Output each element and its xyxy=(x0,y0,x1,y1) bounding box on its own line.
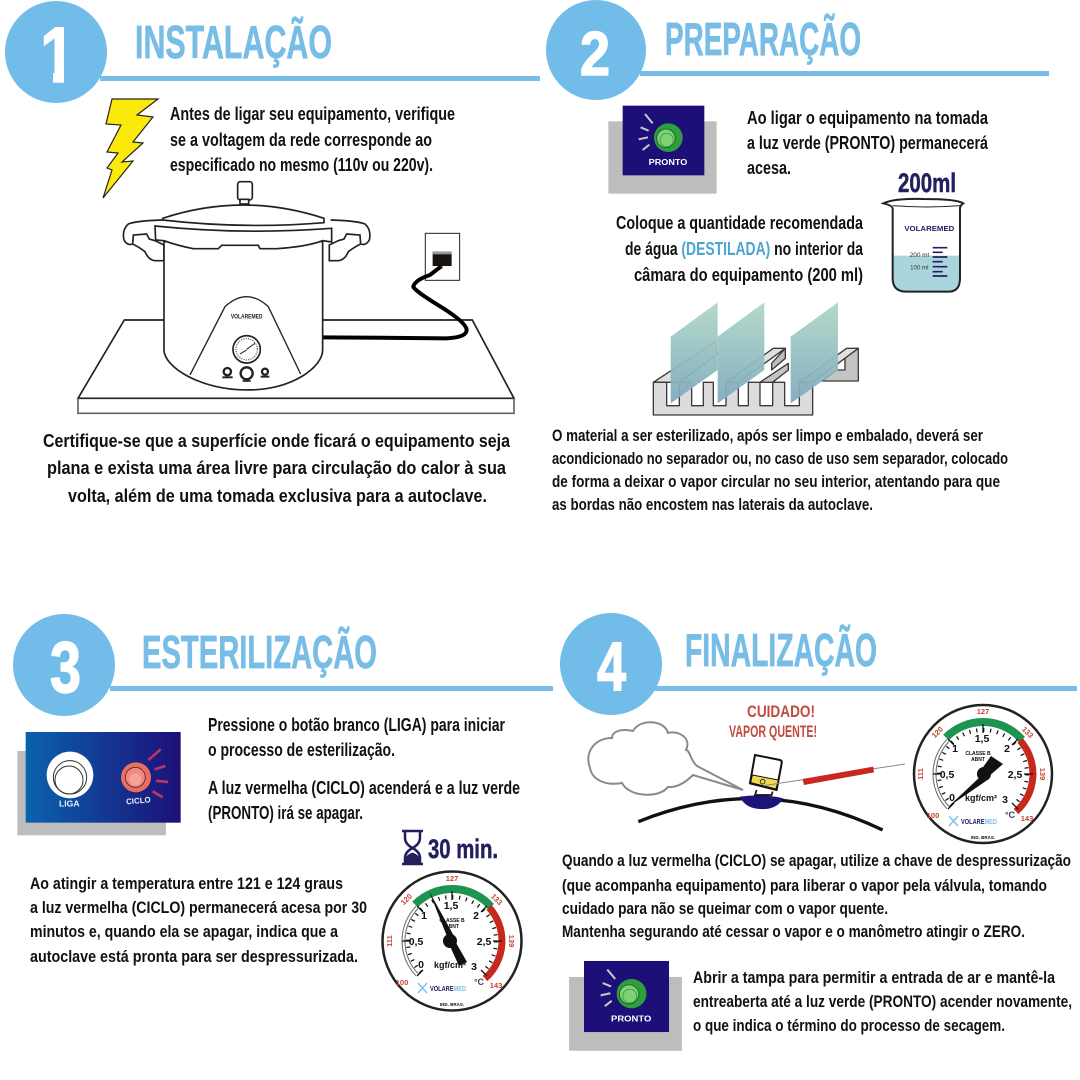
wall socket xyxy=(425,233,460,280)
gauge: pressure during cycle: 127 xyxy=(446,874,458,883)
text: surface check: plana e exista uma área livre para circulação do calor à sua xyxy=(47,458,507,478)
gauge: pressure during cycle: 1,5 xyxy=(444,900,458,912)
icon: steam cloud xyxy=(588,722,743,795)
heading rule 4 xyxy=(650,686,1077,691)
gauge: pressure during cycle: 120 xyxy=(399,892,414,907)
gauge: pressure at zero release: 2 xyxy=(1004,743,1010,755)
number badge 3: 3 xyxy=(50,628,81,708)
warning: hot vapor: CUIDADO! xyxy=(747,702,815,721)
pot body xyxy=(164,242,323,390)
icon: beaker: VOLAREMED xyxy=(904,226,954,233)
heading rule 1 xyxy=(100,76,540,81)
control panel: liga and ciclo xyxy=(17,732,181,835)
table xyxy=(78,320,514,413)
gauge: pressure during cycle: 0 xyxy=(418,959,424,971)
text: cycle timing: autoclave está pronta para ser despressurizada. xyxy=(30,947,358,966)
lid xyxy=(155,182,332,249)
number badge 4: 4 xyxy=(597,628,626,705)
illustration: valve and lid xyxy=(638,755,905,830)
gauge: pressure during cycle: kgf/cm² xyxy=(434,960,466,970)
text: press button: Pressione o botão branco (LIGA) para iniciar xyxy=(208,715,505,735)
gauge: pressure during cycle xyxy=(382,872,522,1010)
number badge 2: 2 xyxy=(580,20,610,89)
text: cycle timing: Ao atingir a temperatura entre 121 e 124 graus xyxy=(30,874,343,893)
control panel: liga and ciclo: CICLO xyxy=(126,795,151,806)
indicator: pronto light xyxy=(608,106,717,194)
text: green light: a luz verde (PRONTO) permanecerá xyxy=(747,133,989,153)
gauge: pressure at zero release: CLASSE B xyxy=(965,751,991,757)
text: material placement xyxy=(552,426,1008,514)
icon: beaker: 100 ml xyxy=(910,266,928,272)
text: green light: acesa. xyxy=(747,158,791,178)
text: distilled water xyxy=(616,213,864,285)
text: depressurize: cuidado para não se queimar com o vapor quente. xyxy=(562,899,888,918)
text: open lid and drying: o que indica o término do processo de secagem. xyxy=(693,1016,1005,1035)
text: green light xyxy=(747,108,989,178)
gauge: pressure during cycle: 0,5 xyxy=(409,936,423,948)
gauge: pressure at zero release: VOLAREMED xyxy=(961,819,997,826)
text: cycle timing: a luz vermelha (CICLO) permanecerá acesa por 30 xyxy=(30,898,367,917)
gauge: pressure at zero release: 139 xyxy=(1038,768,1047,780)
number badge 3 xyxy=(13,614,115,716)
heading rule 3 xyxy=(110,686,553,691)
heading rule 2 xyxy=(640,71,1049,76)
gauge: pressure during cycle: 100 xyxy=(396,978,408,987)
warning: hot vapor: VAPOR QUENTE! xyxy=(729,722,817,741)
gauge: pressure at zero release: 1 xyxy=(952,743,958,755)
gauge: pressure at zero release: 1,5 xyxy=(975,733,989,745)
icon: beaker xyxy=(883,199,963,292)
warning: hot vapor xyxy=(729,702,817,741)
heading: preparação: PREPARAÇÃO xyxy=(665,13,861,65)
heading: instalação: INSTALAÇÃO xyxy=(135,16,332,68)
number badge 4 xyxy=(560,613,662,715)
gauge: pressure at zero release: 111 xyxy=(916,768,925,780)
panel: esterilização xyxy=(13,614,553,1010)
gauge: pressure at zero release: 133 xyxy=(1020,725,1035,740)
gauge: pressure at zero release: 2,5 xyxy=(1008,769,1022,781)
text: voltage check xyxy=(170,104,455,175)
text: surface check xyxy=(43,431,511,506)
gauge: pressure during cycle: 2,5 xyxy=(477,936,491,948)
text: voltage check: se a voltagem da rede corresponde ao xyxy=(170,130,432,150)
text: surface check: volta, além de uma tomada exclusiva para a autoclave. xyxy=(68,486,487,506)
gauge: pressure at zero release: 100 xyxy=(927,811,939,820)
text: distilled water: câmara do equipamento (200 ml) xyxy=(634,265,863,285)
text: surface check: Certifique-se que a superfície onde ficará o equipamento seja xyxy=(43,431,511,451)
gauge: pressure during cycle: ABNT xyxy=(445,924,459,930)
indicator: pronto light again xyxy=(569,961,682,1051)
text: depressurize xyxy=(562,851,1071,941)
gauge: pressure at zero release: 127 xyxy=(977,707,989,716)
text: voltage check: especificado no mesmo (110v ou 220v). xyxy=(170,155,433,175)
illustration: separator rack xyxy=(653,302,858,415)
gauge: pressure during cycle: 2 xyxy=(473,910,479,922)
pot handles xyxy=(123,220,370,261)
gauge: pressure during cycle: 133 xyxy=(489,892,504,907)
gauge: pressure during cycle: CLASSE B xyxy=(439,918,465,924)
gauge: pressure at zero release xyxy=(914,705,1052,843)
gauge: pressure at zero release: 0,5 xyxy=(940,769,954,781)
text: cycle timing: minutos e, quando ela se apagar, indica que a xyxy=(30,922,338,941)
text: press button: o processo de esterilização. xyxy=(208,740,395,760)
heading: esterilização: ESTERILIZAÇÃO xyxy=(142,626,377,678)
text: press button: (PRONTO) irá se apagar. xyxy=(208,803,363,823)
gauge: pressure during cycle: IND. BRAS. xyxy=(440,1002,464,1007)
text: press button: A luz vermelha (CICLO) acenderá e a luz verde xyxy=(208,778,520,798)
gauge: pressure at zero release: 143 xyxy=(1021,814,1033,823)
icon: lightning bolt xyxy=(103,99,158,198)
gauge: pressure during cycle: °C xyxy=(474,977,485,987)
number badge 1: 1 xyxy=(40,10,76,99)
heading: finalização: FINALIZAÇÃO xyxy=(685,624,877,676)
indicator: pronto light: PRONTO xyxy=(649,158,687,167)
label: 200ml: 200ml xyxy=(898,168,956,198)
gauge: pressure at zero release: 120 xyxy=(930,725,945,740)
text: voltage check: Antes de ligar seu equipamento, verifique xyxy=(170,104,455,124)
gauge: pressure during cycle: 111 xyxy=(385,935,394,947)
control panel xyxy=(190,297,301,381)
text: material placement: as bordas não encostem nas laterais da autoclave. xyxy=(552,495,873,514)
power cord xyxy=(323,266,467,338)
gauge: pressure at zero release: IND. BRAS. xyxy=(971,835,995,840)
control panel: liga and ciclo: LIGA xyxy=(59,799,80,809)
indicator: pronto light again: PRONTO xyxy=(611,1015,652,1023)
gauge: pressure at zero release: °C xyxy=(1005,810,1016,820)
text: open lid and drying xyxy=(693,968,1072,1035)
panel: preparação xyxy=(546,0,1049,514)
icon: hourglass xyxy=(402,831,423,864)
illustration: autoclave on table xyxy=(78,182,514,413)
gauge: pressure at zero release: ABNT xyxy=(971,757,985,763)
text: distilled water: Coloque a quantidade recomendada xyxy=(616,213,864,233)
gauge: pressure at zero release: 0 xyxy=(949,792,955,804)
gauge: pressure at zero release: 3 xyxy=(1002,794,1008,806)
text: green light: Ao ligar o equipamento na tomada xyxy=(747,108,989,128)
gauge: pressure during cycle: 3 xyxy=(471,961,477,973)
panel: instalação xyxy=(5,1,540,506)
text: press button xyxy=(208,715,520,823)
panel: finalização xyxy=(560,613,1077,1051)
number badge 1 xyxy=(5,1,107,103)
text: cycle timing xyxy=(30,874,367,966)
icon: beaker: 200 ml xyxy=(910,253,929,259)
text: distilled water: de água (DESTILADA) no interior da xyxy=(625,239,864,259)
gauge: pressure during cycle: 143 xyxy=(490,981,502,990)
gauge: pressure at zero release: kgf/cm² xyxy=(965,793,997,803)
gauge: pressure during cycle: VOLAREMED xyxy=(430,986,466,993)
label: 30 min: 30 min. xyxy=(428,834,498,864)
control panel: VOLAREMED xyxy=(231,313,263,320)
number badge 2 xyxy=(546,0,646,100)
gauge: pressure during cycle: 1 xyxy=(421,910,427,922)
gauge: pressure during cycle: 139 xyxy=(507,935,516,947)
